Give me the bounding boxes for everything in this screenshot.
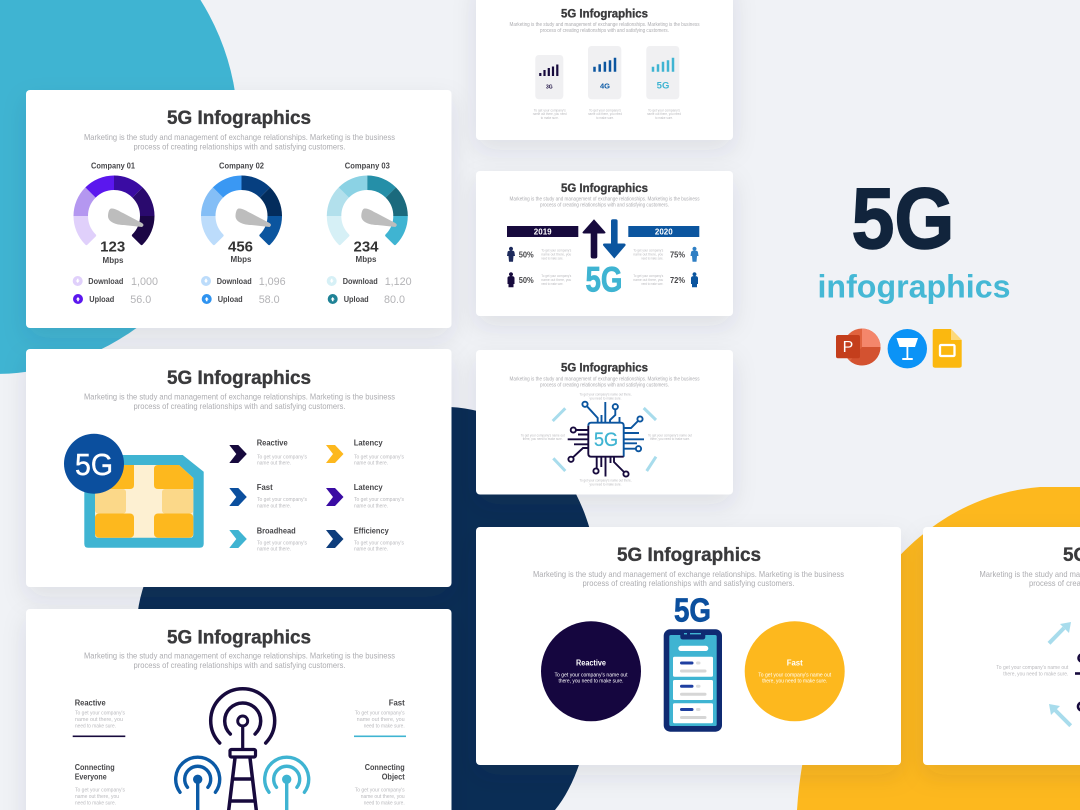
caption bottom (580, 479, 632, 486)
gauge: company 01: 56.0 (130, 294, 151, 306)
icon: chevron Latency yellow (326, 445, 344, 463)
arrow down (603, 219, 626, 258)
icon: chevron Reactive (229, 445, 247, 463)
text: Fast: need to make sure. (364, 724, 405, 730)
text: Connecting Everyone: name out there, you (75, 794, 119, 800)
description: process of creating relationships with and satisfying customers. (134, 142, 346, 152)
phone: 4G (588, 46, 622, 120)
text: Connecting Everyone: Connecting (75, 763, 115, 772)
caption left: there, you need to make sure. (523, 437, 563, 441)
year bar 2020: 2020 (655, 228, 673, 236)
stat row right 1: need to make sure. (641, 256, 663, 260)
description (84, 650, 395, 670)
feature: Latency second: To get your company's (354, 497, 404, 503)
gauge: company 02: 456 (228, 238, 253, 256)
logo: infographics: infographics (818, 268, 1010, 304)
panel: phone with circles (476, 527, 901, 765)
background blob: cyan circle (0, 0, 238, 374)
feature: Efficiency: To get your company's (354, 540, 404, 546)
stat row left 2: name out there, you (541, 278, 571, 282)
heading: 5G Infographics (167, 367, 311, 389)
stat row left 2: 50% (519, 276, 534, 285)
text: Reactive (73, 699, 125, 737)
gauge: company 02 (201, 162, 286, 306)
feature: Reactive: To get your company's (257, 454, 307, 460)
description: Marketing is the study and management of exchange relationships. Marketing is the business (510, 196, 700, 202)
arrow up (583, 219, 605, 258)
feature: Latency second (354, 483, 404, 510)
feature: Broadhead: name out there. (257, 546, 291, 552)
description: process of creating relationships with and satisfying customers. (540, 202, 669, 208)
gauge: company 02: Company 02 (219, 162, 265, 170)
phone: 3G: To get your company's (534, 108, 566, 112)
stat row left 1: 50% (519, 251, 534, 260)
stat row right 2: 72% (670, 276, 685, 285)
gauge: company 01: 123 (100, 238, 125, 256)
panel: cropped right slide (923, 527, 1080, 765)
gauge: company 01 (73, 162, 158, 306)
text: Connecting Everyone: Everyone (75, 772, 107, 781)
feature: Latency: To get your company's (354, 454, 404, 460)
stat row right 2 (633, 272, 698, 287)
text: Fast: Fast (389, 699, 405, 708)
feature: Efficiency (354, 526, 404, 552)
feature: Broadhead: Broadhead (257, 526, 296, 535)
text: Connecting Everyone: To get your company's (75, 788, 125, 794)
description (533, 569, 844, 588)
year bar 2019 (507, 226, 578, 237)
phone: 5G: name out there, you need (647, 112, 681, 116)
phone: 4G: To get your company's (589, 108, 621, 112)
caption: there, you need to make sure. (1003, 672, 1068, 678)
description: Marketing is the study and management of exchange relationships. Marketing is the business (533, 569, 844, 579)
big 5G: 5G (586, 260, 622, 300)
heading: 5G Infographics (167, 107, 311, 129)
panel: 2019 vs 2020 (476, 171, 733, 316)
stat row left 2 (508, 272, 572, 287)
phone: 3G: to make sure. (541, 116, 559, 120)
feature: Latency: name out there. (354, 461, 388, 467)
gauge: company 03: Company 03 (345, 162, 390, 170)
icon: circuit chip: 5G (594, 430, 618, 451)
description: process of creating relationships with and satisfying customers. (134, 660, 346, 670)
panel: SIM card (26, 349, 452, 587)
description: process of creating relationships with and satisfying customers. (134, 401, 346, 411)
description: Marketing is the study and management of exchange relationships. Marketing is the business (84, 392, 395, 402)
feature: Latency (354, 439, 404, 467)
feature: Fast: name out there. (257, 504, 291, 510)
feature: Reactive (257, 439, 307, 467)
phone: 3G: 3G (546, 84, 553, 90)
caption bottom: To get your company's name out there, (580, 479, 632, 483)
icon: antenna tower (176, 689, 309, 810)
icon: chevron Broadhead (229, 530, 247, 548)
feature: Latency: Latency (354, 439, 383, 448)
stat row right 1: 75% (670, 251, 685, 260)
text: Reactive: Reactive (75, 699, 106, 708)
gauge: company 03 (327, 162, 412, 306)
feature: Reactive: Reactive (257, 439, 288, 448)
background blob: navy (137, 407, 599, 810)
5G logo: 5G (674, 592, 711, 628)
feature: Broadhead (257, 526, 307, 552)
circle: Reactive: To get your company's name out (554, 673, 628, 679)
description: process of creating relationships with and satisfying customers. (540, 382, 669, 388)
gauge: company 01: Mbps (103, 256, 124, 265)
stat row right 1 (633, 247, 698, 262)
caption right: there, you need to make sure. (650, 437, 690, 441)
gauge: company 03: Download (343, 277, 378, 286)
text: Fast (354, 699, 406, 737)
icon: circuit chip (568, 402, 644, 477)
gauge: company 03: 80.0 (384, 294, 405, 306)
description (84, 132, 395, 152)
gauge: company 02: Download (217, 277, 252, 286)
stat row right 2: need to make sure. (641, 282, 663, 286)
caption bottom: you need to make sure. (590, 482, 622, 486)
circle: Fast: To get your company's name out (758, 673, 832, 679)
stat row left 1: need to make sure. (541, 256, 563, 260)
caption top (580, 393, 632, 400)
icon: smartphone (664, 629, 722, 732)
stat row right 1: name out there, you (633, 252, 663, 256)
stat row left 1: To get your company's (541, 248, 572, 252)
text: Connecting Object (355, 763, 405, 806)
text: Connecting Everyone (75, 763, 125, 806)
feature: Efficiency: name out there. (354, 546, 388, 552)
text: Fast: To get your company's (355, 711, 405, 717)
text: Connecting Object: To get your company's (355, 788, 405, 794)
text: Reactive: To get your company's (75, 711, 125, 717)
icon: PowerPoint (836, 328, 880, 366)
gauge: company 01: 1,000 (131, 276, 158, 288)
text: Connecting Object: name out there, you (361, 794, 405, 800)
text: Fast: name out there, you (357, 717, 405, 723)
phone: 5G: to make sure. (655, 116, 673, 120)
phone: 3G (533, 55, 567, 120)
feature: Reactive: name out there. (257, 461, 291, 467)
phone: 5G (646, 46, 681, 120)
circle: Fast (745, 621, 845, 721)
phone: 4G: to make sure. (596, 116, 614, 120)
caption left (521, 433, 565, 441)
description (84, 392, 395, 411)
gauge: company 03: 234 (353, 238, 379, 256)
phone: 4G: name out there, you need (588, 112, 622, 116)
feature: Fast (257, 483, 307, 510)
icon: chevron Fast (229, 488, 247, 506)
panel: chip (476, 350, 733, 494)
circle: Reactive (541, 621, 641, 721)
stat row left 1 (507, 247, 572, 262)
gauge: company 02: 58.0 (259, 294, 280, 306)
stat row left 2: To get your company's (541, 274, 572, 278)
heading: 5G Infographics (561, 6, 648, 20)
caption top: To get your company's name out there, (580, 393, 632, 397)
panel: speed gauges (26, 90, 452, 328)
decorative arrows around chip (553, 408, 656, 471)
caption top: you need to make sure. (590, 396, 622, 400)
gauge: company 02: Mbps (231, 255, 252, 264)
text: Connecting Object: need to make sure. (364, 800, 405, 806)
gauge: company 03: Upload (344, 295, 369, 304)
caption right (648, 433, 692, 441)
description (510, 376, 700, 388)
text: Reactive: name out there, you (75, 717, 123, 723)
stat row right 1: To get your company's (633, 248, 664, 252)
feature: Fast: To get your company's (257, 497, 307, 503)
text: Connecting Object: Connecting (365, 763, 405, 772)
feature: Efficiency: Efficiency (354, 526, 389, 535)
icon: Google Slides (933, 329, 962, 368)
icon: chevron Efficiency (326, 530, 344, 548)
gauge: company 01: Upload (89, 295, 115, 304)
text: Connecting Everyone: need to make sure. (75, 800, 116, 806)
icon: SIM card with 5G badge (64, 434, 204, 548)
gauge: company 01: Company 01 (91, 162, 136, 170)
cropped chip icon (1075, 654, 1080, 710)
year bar 2019: 2019 (534, 228, 552, 236)
text: Connecting Object: Object (382, 772, 405, 781)
description: Marketing is the study and management of exchange relationships. Marketing is the business (510, 376, 700, 382)
description: process of creating relationships with and satisfying customers. (540, 28, 669, 34)
heading: 5G Infographics (561, 181, 648, 195)
circle: Reactive: there, you need to make sure. (558, 679, 624, 685)
stat row right 2: name out there, you (633, 278, 663, 282)
stat row left 2: need to make sure. (541, 282, 563, 286)
caption right: To get your company's name out (648, 433, 692, 437)
icon: PowerPoint: P (843, 339, 853, 356)
light arrow up-right (1049, 622, 1071, 643)
description (510, 196, 700, 208)
phone: 5G: To get your company's (648, 108, 680, 112)
heading: 5G Infographics (167, 626, 311, 648)
stat row right 2: To get your company's (633, 274, 664, 278)
panel: antenna tower (26, 609, 452, 810)
year bar 2020 (628, 226, 699, 237)
icon: SIM card with 5G badge: 5G (75, 447, 113, 482)
stat row left 1: name out there, you (541, 252, 571, 256)
icon: Keynote (888, 329, 927, 368)
heading: 5G Infographics (617, 544, 761, 566)
circle: Fast: Fast (787, 658, 803, 668)
background blob: yellow (797, 487, 1080, 810)
description: Marketing is the study and management of exchange relationships. Marketing is the business (84, 132, 395, 142)
gauge: company 03: Mbps (356, 255, 377, 264)
phone: 3G: name out there, you need (533, 112, 567, 116)
caption (996, 665, 1069, 678)
caption left: To get your company's name out (521, 433, 565, 437)
gauge: company 02: Upload (218, 295, 243, 304)
heading: 5G Infographics (561, 360, 648, 374)
icon: chevron Latency purple (326, 488, 344, 506)
feature: Fast: Fast (257, 483, 273, 492)
feature: Latency second: Latency (354, 483, 383, 492)
feature: Latency second: name out there. (354, 504, 388, 510)
description: process of creating relationships with and satisfying customers. (582, 578, 794, 588)
circle: Reactive: Reactive (576, 658, 606, 668)
caption: To get your company's name out (996, 665, 1069, 671)
panel: signal generations (476, 0, 733, 140)
description: Marketing is the study and management of exchange relationships. Marketing is the business (510, 22, 700, 28)
gauge: company 02: 1,096 (259, 276, 286, 288)
phone: 5G: 5G (657, 81, 669, 92)
text: Reactive: need to make sure. (75, 724, 116, 730)
circle: Fast: there, you need to make sure. (762, 679, 827, 685)
light arrow up-left (1049, 704, 1071, 726)
description: Marketing is the study and management of exchange relationships. Marketing is the business (84, 650, 395, 660)
description (510, 22, 700, 34)
phone: 4G: 4G (600, 82, 610, 91)
gauge: company 03: 1,120 (385, 276, 412, 288)
gauge: company 01: Download (88, 277, 124, 286)
logo: 5G: 5G (852, 171, 954, 267)
description (980, 569, 1080, 588)
feature: Broadhead: To get your company's (257, 540, 307, 546)
